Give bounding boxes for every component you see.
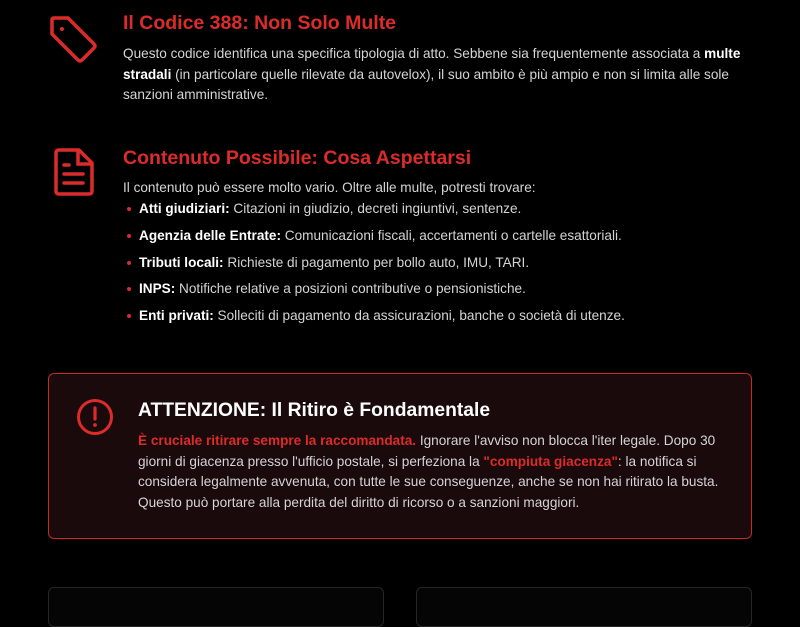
list: Enti privati: Solleciti di pagamento da assicurazioni, banche o società di utenze.	[139, 308, 625, 323]
list: Agenzia delle Entrate: Comunicazioni fiscali, accertamenti o cartelle esattoriali.	[139, 228, 622, 243]
list: Tributi locali: Richieste di pagamento per bollo auto, IMU, TARI.	[139, 255, 529, 270]
icon: tag	[50, 16, 97, 63]
heading: Contenuto Possibile: Cosa Aspettarsi	[123, 147, 471, 169]
section: codice 388	[50, 12, 740, 102]
section: contenuto possibile	[54, 147, 625, 323]
panel: attenzione alert	[48, 373, 752, 539]
icon: document	[54, 148, 94, 196]
alert heading: ATTENZIONE: Il Ritiro è Fondamentale	[138, 400, 490, 421]
icon: exclamation circle	[77, 399, 113, 435]
list: Atti giudiziari: Citazioni in giudizio, decreti ingiuntivi, sentenze.	[139, 201, 521, 216]
panel: bottom left card	[48, 587, 384, 627]
heading: Il Codice 388: Non Solo Multe	[123, 12, 396, 34]
list	[127, 201, 625, 323]
panel: bottom right card	[416, 587, 752, 627]
text block: Questo codice identifica una specifica tipologia di atto. Sebbene sia frequentemente associata a multe stradali (in particolare quelle rilevate da autovelox), il suo ambito è più ampio e non si limita alle sole sanzioni amministrative.	[123, 46, 740, 102]
list: INPS: Notifiche relative a posizioni contributive o pensionistiche.	[139, 281, 526, 296]
intro text: Il contenuto può essere molto vario. Oltre alle multe, potresti trovare:	[123, 180, 536, 195]
alert text: È cruciale ritirare sempre la raccomandata. Ignorare l'avviso non blocca l'iter legale. Dopo 30 giorni di giacenza presso l'ufficio postale, si perfeziona la "compiuta giacenza": la notifica si considera legalmente avvenuta, con tutte le sue conseguenze, anche se non hai ritirato la busta. Questo può portare alla perdita del diritto di ricorso o a sanzioni maggiori.	[138, 433, 718, 510]
